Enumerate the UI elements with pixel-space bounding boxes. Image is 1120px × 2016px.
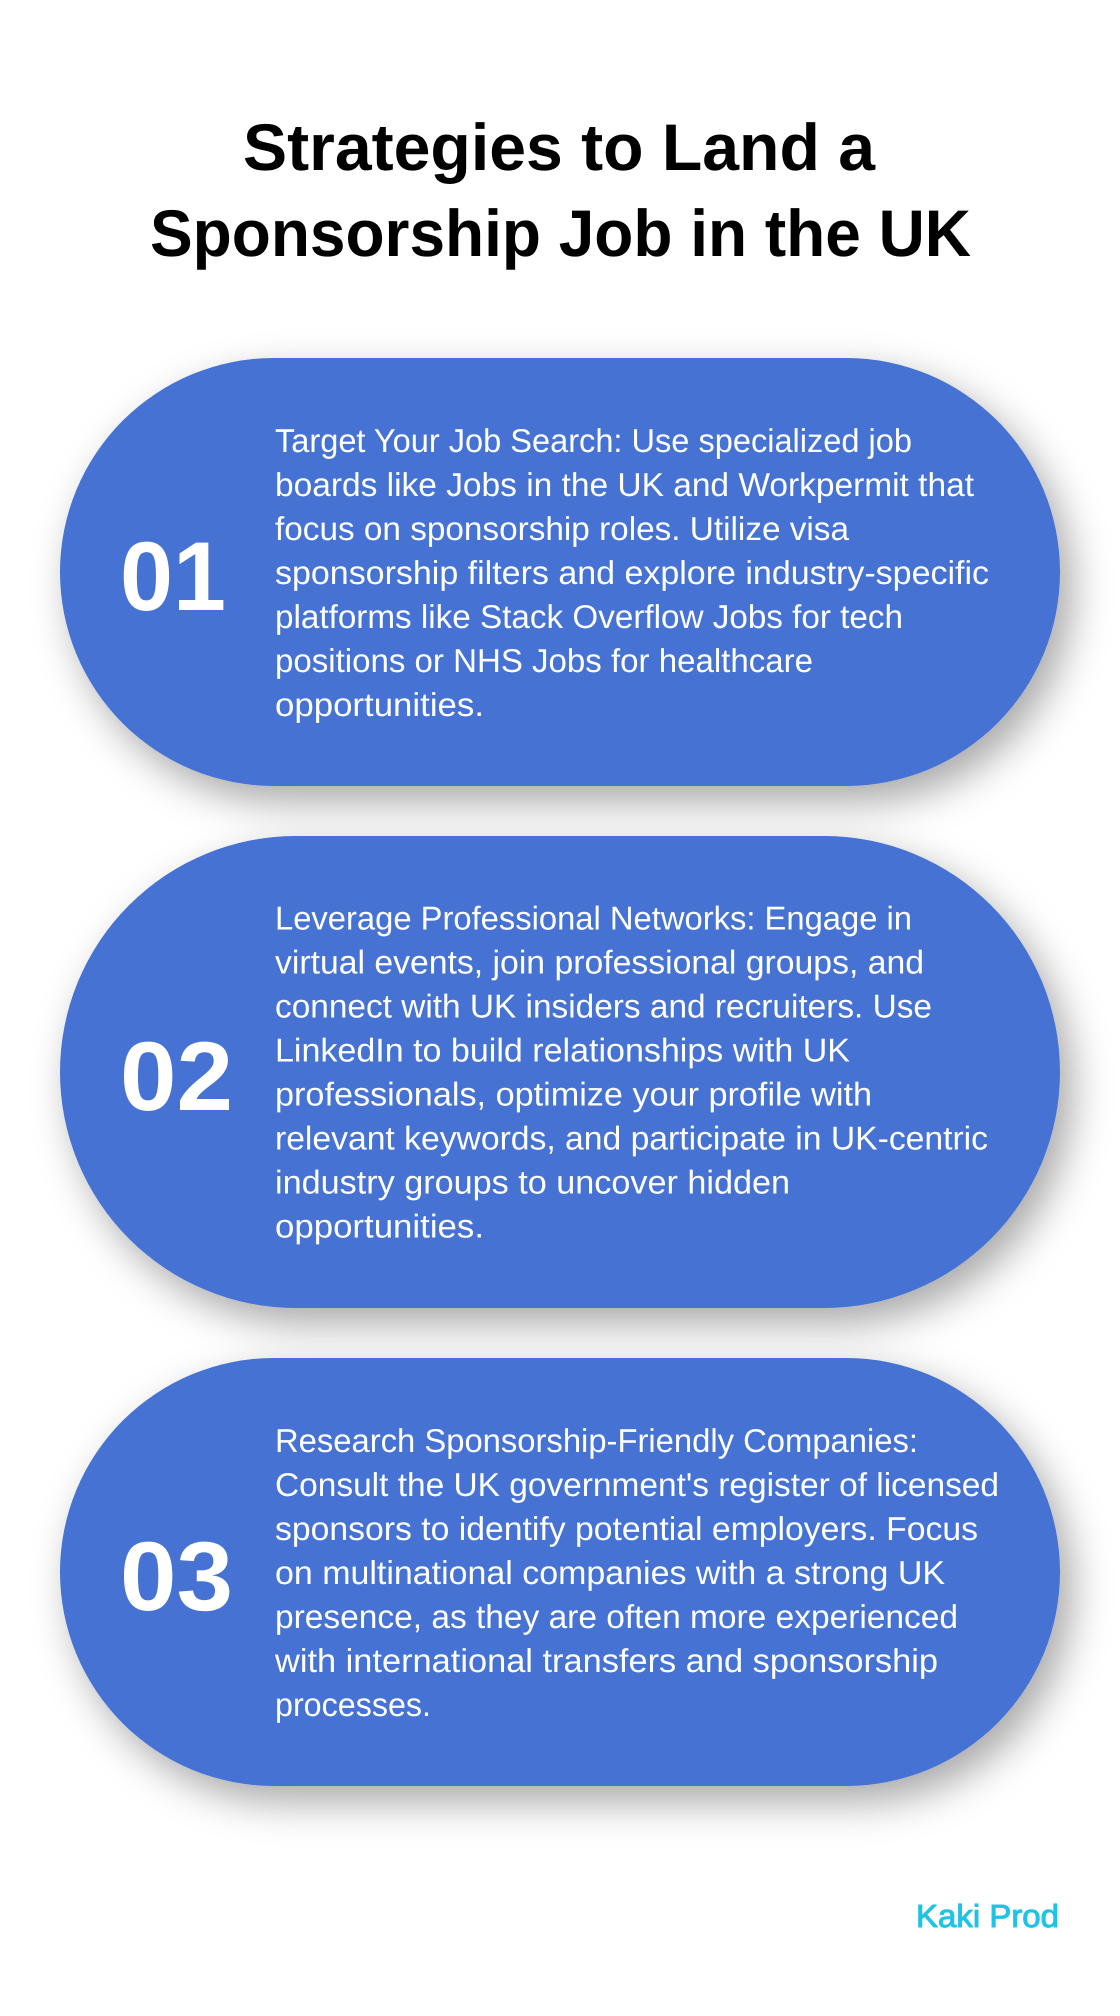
text block: target your job search — [275, 422, 989, 723]
logo: Kaki Prod: Kaki Prod — [916, 1898, 1059, 1934]
text block: leverage professional networks — [275, 900, 988, 1244]
text block: research sponsorship-friendly companies: presence, as they are often more experienced — [275, 1598, 958, 1635]
text block: research sponsorship-friendly companies — [274, 1422, 999, 1723]
step number 03: 03 — [120, 1521, 233, 1631]
text block: leverage professional networks: professionals, optimize your profile with — [275, 1076, 872, 1112]
text block: leverage professional networks: industry groups to uncover hidden — [275, 1164, 790, 1200]
text block: leverage professional networks: opportunities. — [275, 1208, 484, 1244]
text block: target your job search: platforms like Stack Overflow Jobs for tech — [275, 598, 903, 635]
title — [150, 110, 971, 270]
text block: research sponsorship-friendly companies: Consult the UK government's register of licensed — [275, 1466, 999, 1503]
text block: research sponsorship-friendly companies: processes. — [275, 1686, 431, 1723]
text block: leverage professional networks: connect with UK insiders and recruiters. Use — [275, 988, 932, 1024]
pill background 03 — [60, 1358, 1060, 1786]
step number 01: 01 — [120, 521, 226, 631]
text block: target your job search: boards like Jobs in the UK and Workpermit that — [275, 466, 974, 503]
title: Sponsorship Job in the UK — [150, 196, 971, 270]
text block: target your job search: focus on sponsorship roles. Utilize visa — [275, 510, 850, 547]
text block: target your job search: opportunities. — [275, 686, 484, 723]
text block: leverage professional networks: relevant keywords, and participate in UK-centric — [275, 1120, 988, 1156]
panel: step 02 leverage professional networks — [60, 836, 1060, 1308]
panel: step 01 target your job search — [60, 358, 1060, 786]
text block: leverage professional networks: LinkedIn to build relationships with UK — [275, 1032, 850, 1068]
panel: step 03 research sponsorship-friendly companies — [60, 1358, 1060, 1786]
text block: leverage professional networks: Leverage Professional Networks: Engage in — [275, 900, 912, 936]
pill background 01 — [60, 358, 1060, 786]
step number 02: 02 — [120, 1021, 233, 1131]
text block: research sponsorship-friendly companies: on multinational companies with a strong UK — [275, 1554, 945, 1591]
text block: research sponsorship-friendly companies: with international transfers and sponsorship — [274, 1642, 938, 1679]
text block: leverage professional networks: virtual events, join professional groups, and — [275, 944, 924, 980]
text block: target your job search: positions or NHS Jobs for healthcare — [275, 642, 813, 679]
text block: research sponsorship-friendly companies: sponsors to identify potential employers. Focus — [275, 1510, 978, 1547]
title: Strategies to Land a — [243, 110, 876, 184]
pill background 02 — [60, 836, 1060, 1308]
text block: research sponsorship-friendly companies: Research Sponsorship-Friendly Companies: — [275, 1422, 918, 1459]
text block: target your job search: sponsorship filters and explore industry-specific — [275, 554, 989, 591]
text block: target your job search: Target Your Job Search: Use specialized job — [275, 422, 912, 459]
